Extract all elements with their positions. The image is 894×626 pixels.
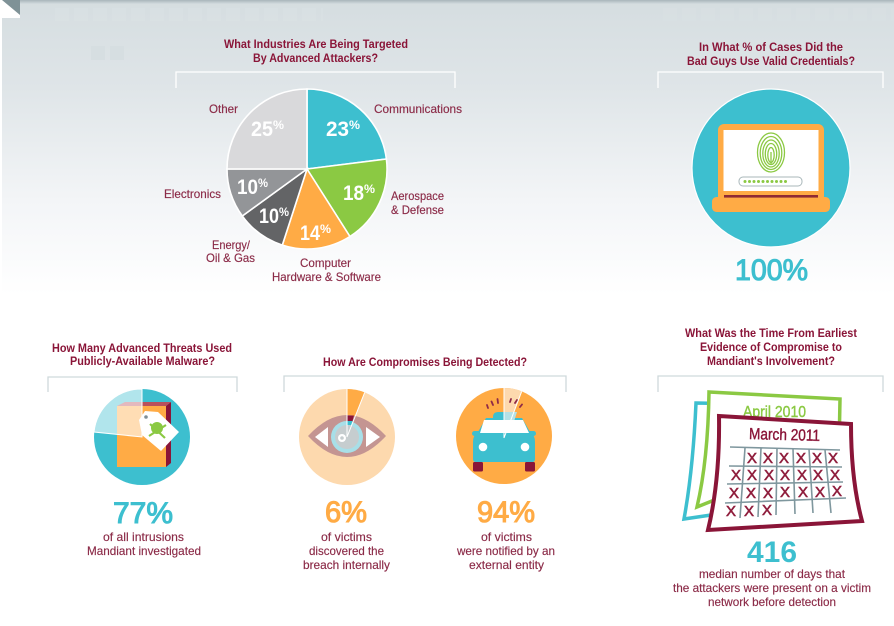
icon: calendars: X [815, 484, 825, 501]
caption: external: of victims [481, 530, 532, 544]
heading: industries [224, 37, 408, 65]
heading: time: What Was the Time From Earliest [685, 326, 857, 340]
caption: external: external entity [469, 558, 544, 572]
icon: calendars: X [763, 485, 773, 502]
heading: malware: Publicly-Available Malware? [70, 354, 215, 368]
pie percent values: 10 [259, 205, 279, 228]
caption: internal: of victims [321, 530, 372, 544]
icon: calendars: X [726, 503, 736, 520]
icon: calendars: X [813, 467, 823, 484]
pie chart [227, 89, 387, 249]
heading: malware: How Many Advanced Threats Used [52, 341, 232, 355]
pie percent values: 18 [343, 182, 364, 205]
icon: calendars: March 2011 [749, 426, 820, 445]
icon: calendars: X [747, 450, 757, 467]
icon: calendars: X [747, 467, 757, 484]
pie percent values: 25 [251, 118, 273, 141]
caption: days: the attackers were present on a victim [673, 581, 871, 595]
pie labels: Computer [300, 256, 351, 270]
pie percent values: 10 [237, 176, 258, 199]
panel: malware [48, 341, 237, 558]
caption: days: network before detection [708, 595, 836, 609]
caption: malware [87, 530, 201, 558]
pie percent values: % [273, 118, 284, 132]
stat: 416: 416 [747, 536, 797, 569]
heading: industries: By Advanced Attackers? [253, 51, 378, 65]
pie labels: & Defense [391, 203, 444, 217]
heading: detection: How Are Compromises Being Detected? [323, 355, 527, 369]
icon: calendars: X [779, 450, 789, 467]
icon: calendars: X [780, 484, 790, 501]
pie percent values: 23 [326, 118, 349, 141]
icon: calendars: X [780, 467, 790, 484]
icon: calendars: X [729, 485, 739, 502]
icon: calendars: X [798, 484, 808, 501]
caption: malware: of all intrusions [103, 530, 184, 544]
panel: detection [284, 355, 566, 572]
icon: calendars [684, 392, 862, 530]
icon: calendars: X [812, 450, 822, 467]
heading: credentials: Bad Guys Use Valid Credentials? [687, 54, 855, 68]
icon: calendars: X [731, 467, 741, 484]
heading: time: Mandiant's Involvement? [707, 354, 835, 368]
pie percent values: % [258, 176, 268, 190]
pie labels: Other [209, 102, 238, 116]
pie percent values [237, 118, 375, 245]
pie labels: Electronics [164, 187, 221, 201]
heading: malware [52, 341, 232, 368]
icon: calendars: X [764, 467, 774, 484]
pie percent values: % [349, 118, 360, 132]
stat: 6%: 6% [325, 496, 367, 529]
icon: calendars: X [796, 450, 806, 467]
icon: calendars: X [830, 467, 840, 484]
caption: days: median number of days that [699, 567, 846, 581]
pie percent values: % [364, 182, 375, 196]
pie labels: Oil & Gas [206, 251, 255, 265]
icon: eye [299, 389, 395, 485]
caption: days [673, 567, 871, 609]
icon: calendars: April 2010 [743, 404, 806, 421]
caption: internal: breach internally [303, 558, 390, 572]
icon: calendars: X [762, 502, 772, 519]
corner fold [0, 0, 20, 18]
heading: time [685, 326, 857, 368]
pie labels: Energy/ [212, 238, 251, 252]
pie percent values: % [279, 205, 289, 219]
icon: calendars: X [832, 483, 842, 500]
icon: calendars: X [746, 485, 756, 502]
icon: calendars: X [828, 450, 838, 467]
icon: laptop with fingerprint [692, 89, 850, 247]
stat: 100%: 100% [735, 254, 808, 287]
heading: time: Evidence of Compromise to [700, 340, 842, 354]
stat: 94%: 94% [477, 496, 535, 529]
heading: industries: What Industries Are Being Targeted [224, 37, 408, 51]
pie percent values: % [320, 222, 331, 236]
pie percent values: 14 [300, 222, 320, 245]
heading: credentials [687, 40, 855, 68]
panel: time to detection [658, 326, 883, 609]
caption: internal: discovered the [309, 544, 384, 558]
caption: external: were notified by an [456, 544, 555, 558]
pie labels: Aerospace [391, 189, 444, 203]
caption: malware: Mandiant investigated [87, 544, 201, 558]
icon: malware book with tag [94, 389, 190, 485]
pie labels: Hardware & Software [272, 270, 381, 284]
heading: credentials: In What % of Cases Did the [699, 40, 843, 54]
stat: 77%: 77% [113, 497, 173, 530]
pie labels [164, 102, 462, 284]
icon: car [456, 388, 552, 484]
icon: calendars: X [797, 467, 807, 484]
icon: calendars: X [744, 503, 754, 520]
caption: external [456, 530, 555, 572]
icon: calendars: X [763, 450, 773, 467]
panel: valid credentials [658, 40, 883, 287]
caption: internal [303, 530, 390, 572]
panel: targeted industries [164, 37, 462, 284]
pie labels: Communications [374, 102, 462, 116]
